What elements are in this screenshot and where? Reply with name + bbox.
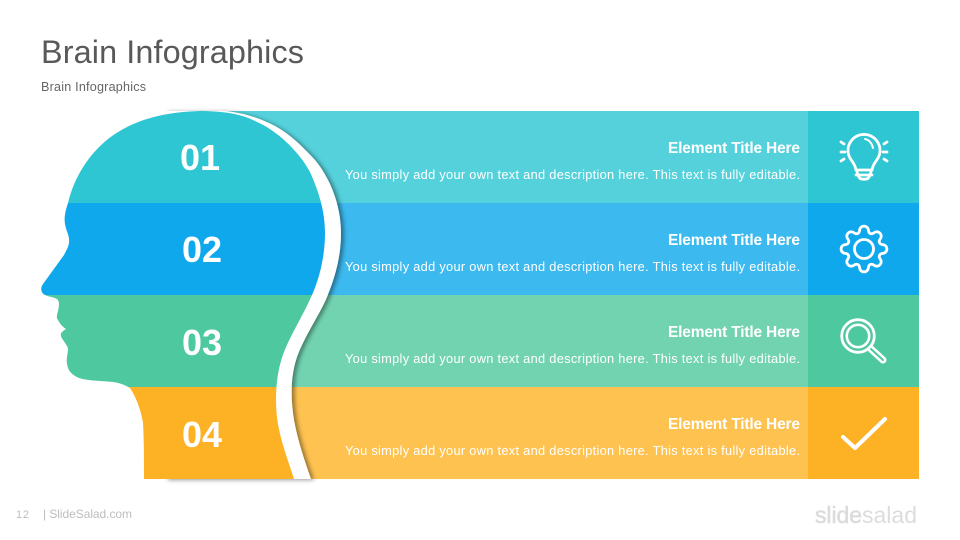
text block 1: Element Title Here	[668, 140, 800, 157]
text block 3: Element Title Here	[668, 324, 800, 341]
text block 2: Element Title Here	[668, 232, 800, 249]
row backgrounds	[200, 111, 808, 479]
icon: magnifier	[842, 320, 883, 360]
footer site name: | SlideSalad.com	[43, 507, 132, 521]
text block 3: You simply add your own text and description here. This text is fully editable.	[345, 351, 800, 366]
icon: gear	[841, 226, 887, 272]
icon column	[808, 111, 919, 479]
text block 2: You simply add your own text and description here. This text is fully editable.	[345, 259, 800, 274]
icon: light bulb	[841, 134, 887, 179]
text block 3	[345, 324, 800, 366]
head silhouette	[41, 111, 325, 479]
text block 1: You simply add your own text and description here. This text is fully editable.	[345, 167, 800, 182]
subtitle: Brain Infographics	[41, 80, 146, 94]
number 02: 02	[182, 229, 222, 270]
icon: check mark	[843, 419, 885, 448]
number 01: 01	[180, 137, 220, 178]
number 04: 04	[182, 414, 222, 455]
text block 2	[345, 232, 800, 274]
text block 1	[345, 140, 800, 182]
white curved band with shadow	[165, 111, 341, 479]
text block 4: Element Title Here	[668, 416, 800, 433]
text block 4	[345, 416, 800, 458]
number 03: 03	[182, 322, 222, 363]
page number: 12	[16, 509, 29, 521]
logo wordmark: salad	[862, 502, 917, 528]
title: Brain Infographics	[41, 34, 304, 70]
text block 4: You simply add your own text and description here. This text is fully editable.	[345, 443, 800, 458]
logo wordmark	[815, 502, 917, 528]
logo wordmark: slide	[815, 502, 862, 528]
